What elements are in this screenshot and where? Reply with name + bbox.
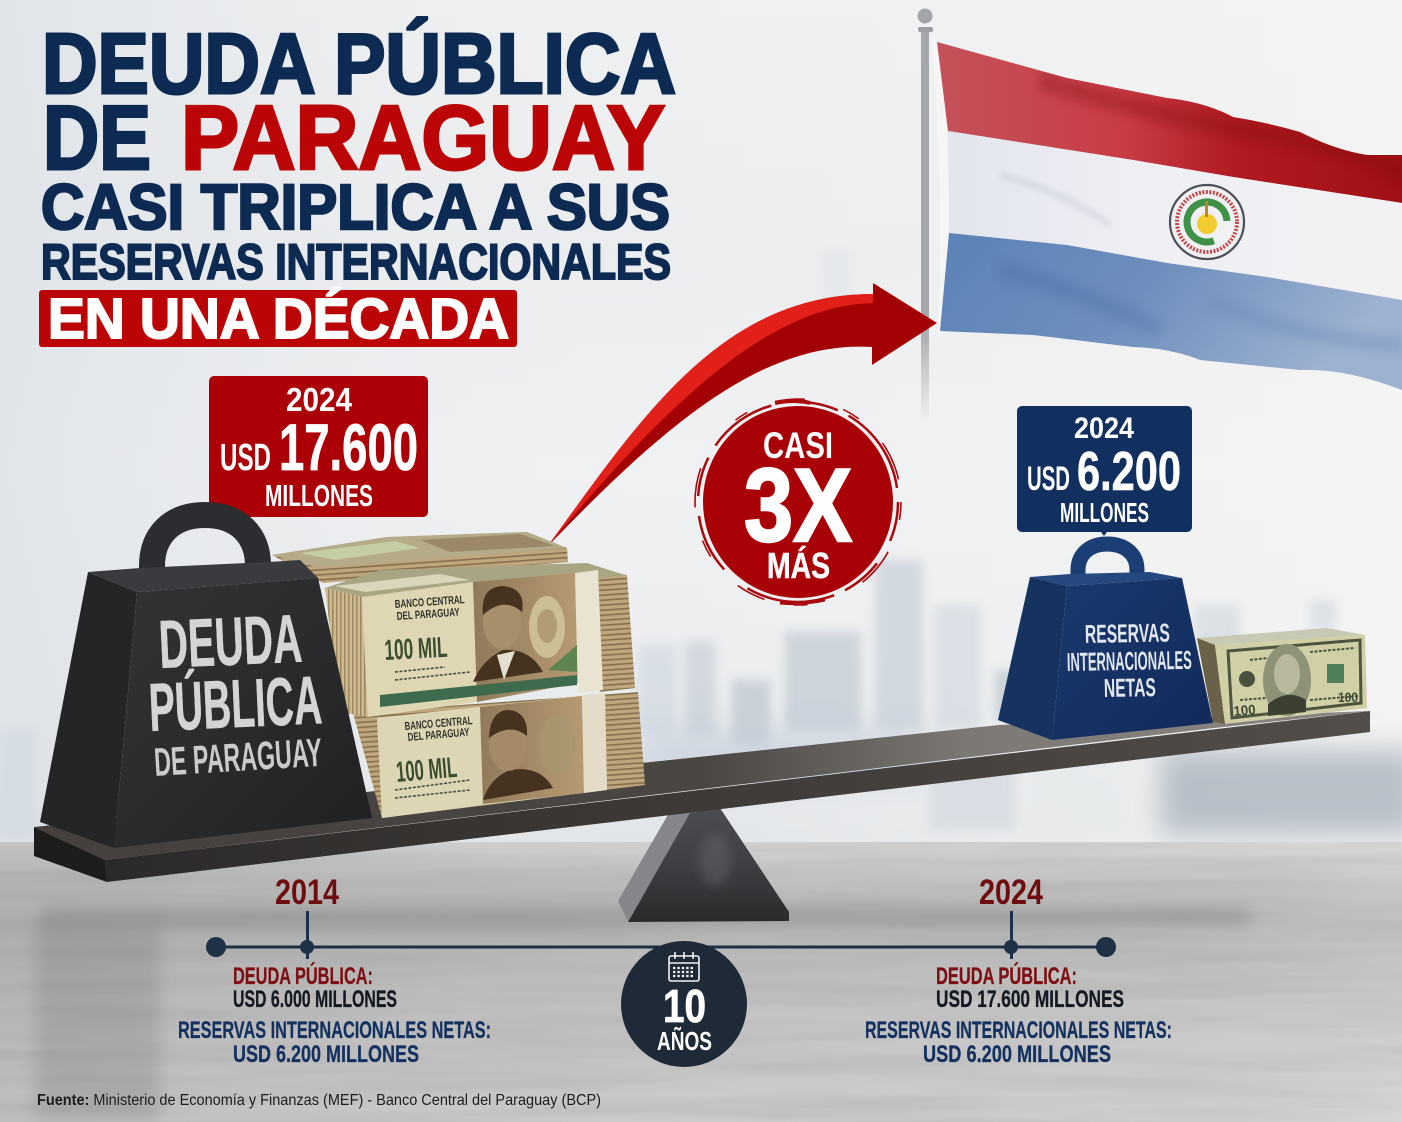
badge: más: MÁS <box>767 545 830 586</box>
2014 figures <box>178 962 491 1068</box>
upper stack <box>325 563 635 717</box>
flag: blue band <box>940 233 1402 390</box>
2024 figures: USD 17.600 MILLONES <box>936 986 1124 1013</box>
money stack: US dollars <box>1197 628 1367 724</box>
2014 figures: DEUDA PÚBLICA: <box>233 962 373 990</box>
3X badge <box>695 399 901 605</box>
callout: 2024 reserves: USD <box>1027 460 1070 498</box>
callout: 2024 debt: MILLONES <box>265 478 373 513</box>
upper bill: portraits <box>473 586 577 682</box>
timeline <box>206 911 1116 959</box>
lower stack: BANCO CENTRAL <box>404 715 473 733</box>
reserves weight handle <box>1078 544 1137 575</box>
flag: white band <box>948 131 1402 300</box>
flag: folds <box>1000 80 1402 345</box>
2014 figures: USD 6.000 MILLONES <box>233 986 397 1013</box>
title line 5: highlighted badge: EN UNA DÉCADA <box>48 287 509 351</box>
flag: white hoist hem <box>932 35 950 335</box>
upper stack: 100 MIL <box>384 632 448 667</box>
title line 2: Paraguay: PARAGUAY <box>181 88 665 189</box>
badge: 3X: 3X <box>744 448 852 564</box>
upper stack: DEL PARAGUAY <box>396 607 460 623</box>
reserves label: internacionales: INTERNACIONALES <box>1067 645 1192 677</box>
callout: 2024 reserves: 2024 <box>1074 412 1134 445</box>
title line 1: DEUDA PÚBLICA <box>42 17 676 112</box>
2024 figures: USD 6.200 MILLONES <box>923 1041 1111 1068</box>
callout: 2024 reserves <box>1017 406 1192 536</box>
title line 4: RESERVAS INTERNACIONALES <box>41 234 671 290</box>
lower stack <box>353 692 645 818</box>
seesaw beam <box>34 711 1370 882</box>
icon: calendar <box>669 952 699 981</box>
callout: 2024 debt: USD <box>220 437 271 479</box>
badge: disc <box>703 406 893 598</box>
2024 figures: RESERVAS INTERNACIONALES NETAS: <box>865 1017 1172 1044</box>
badge number: 10 <box>663 980 706 1032</box>
2014 figures: USD 6.200 MILLONES <box>233 1041 419 1068</box>
2024 figures <box>865 962 1172 1068</box>
money stacks: guaraní <box>272 532 645 818</box>
badge: brushed outer ring <box>695 399 901 605</box>
title line 3: CASI TRIPLICA A SUS <box>41 171 670 243</box>
weight handle <box>152 515 258 572</box>
money stack: US dollars: 100 <box>1233 701 1256 719</box>
weight: net international reserves <box>998 544 1213 740</box>
arrow: dark body and head <box>547 283 937 547</box>
upper stack: BANCO CENTRAL <box>394 594 465 611</box>
ten years badge <box>621 941 747 1067</box>
lower bill: portrait <box>483 710 575 800</box>
top loose stack <box>272 532 568 583</box>
red curved arrow <box>547 283 937 547</box>
callout: 2024 debt: 2024 <box>286 381 353 418</box>
flag: national emblem <box>1170 185 1244 259</box>
badge: casi: CASI <box>763 425 833 466</box>
badge unit: AÑOS <box>657 1026 712 1056</box>
reserves weight body <box>998 572 1213 740</box>
2014 figures: RESERVAS INTERNACIONALES NETAS: <box>178 1017 491 1044</box>
reserves label: reservas: RESERVAS <box>1085 618 1170 649</box>
reserves label: netas: NETAS <box>1104 672 1156 703</box>
year label: 2024: 2024 <box>979 873 1043 912</box>
callout: 2024 reserves: 6.200 <box>1077 440 1181 502</box>
weight label: deuda: DEUDA <box>157 601 304 683</box>
year label: 2014: 2014 <box>275 873 339 912</box>
background: blurred city skyline <box>0 250 1402 840</box>
background: brushed metal floor <box>0 842 1402 1122</box>
money stack: US dollars: 100 <box>1338 689 1358 705</box>
arrow: bright upper lip <box>547 294 873 547</box>
weight label: de Paraguay: DE PARAGUAY <box>153 731 323 785</box>
title <box>39 17 676 351</box>
flag: red band <box>937 42 1402 203</box>
weight body <box>40 560 372 848</box>
flag pole <box>918 8 933 420</box>
title line 2: de: DE <box>43 88 151 189</box>
lower stack: 100 MIL <box>395 752 458 789</box>
weight: public debt <box>40 515 372 848</box>
flag of Paraguay <box>932 35 1402 390</box>
upper bill: green strip <box>380 675 577 707</box>
2024 figures: DEUDA PÚBLICA: <box>936 962 1077 990</box>
callout: 2024 debt: 17.600 <box>279 410 418 484</box>
fulcrum <box>618 808 789 922</box>
source note: Fuente: Ministerio de Economía y Finanzas (MEF) - Banco Central del Paraguay (BCP) <box>37 1092 601 1109</box>
callout: 2024 debt <box>209 376 428 517</box>
background: hazy sky <box>0 0 1402 850</box>
lower stack: DEL PARAGUAY <box>407 727 470 744</box>
callout: 2024 reserves: MILLONES <box>1060 497 1149 528</box>
weight label: pública: PÚBLICA <box>147 662 324 746</box>
